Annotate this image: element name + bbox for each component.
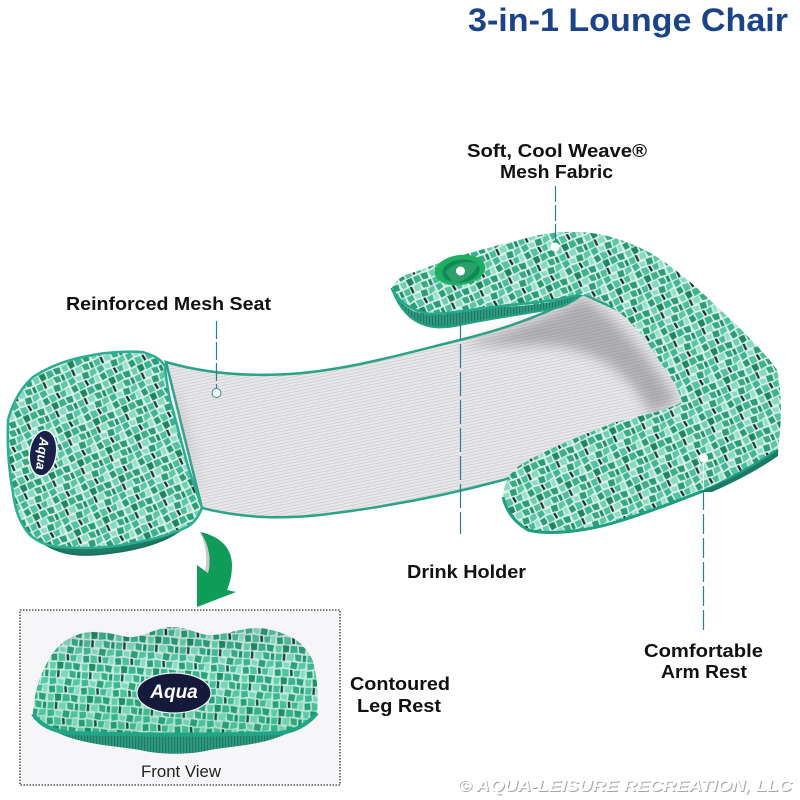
logo: Aqua xyxy=(137,673,211,713)
icon: drink holder xyxy=(433,252,487,288)
logo: Aqua on pillow: Aqua xyxy=(33,436,52,471)
reinforced mesh seat xyxy=(166,294,700,517)
copyright watermark: © AQUA-LEISURE RECREATION, LLC xyxy=(458,778,793,795)
label: soft, cool weave mesh fabric xyxy=(467,141,647,182)
copyright watermark: © AQUA-LEISURE RECREATION, LLC xyxy=(459,779,794,796)
label: contoured leg rest xyxy=(350,674,450,716)
label: contoured leg rest: Leg Rest xyxy=(357,696,441,716)
icon: green arrow xyxy=(197,532,236,607)
label: drink holder: Drink Holder xyxy=(407,562,526,582)
callout line: drink holder xyxy=(456,266,465,534)
logo: Aqua: Aqua xyxy=(149,682,198,703)
label: contoured leg rest: Contoured xyxy=(350,674,450,694)
lounge chair float xyxy=(8,232,781,555)
panel: front view xyxy=(20,610,340,785)
callout line: mesh fabric xyxy=(550,186,560,252)
leg rest pillow xyxy=(8,352,202,555)
callout line: arm rest xyxy=(699,454,708,630)
label: soft, cool weave mesh fabric: Soft, Cool Weave® xyxy=(467,141,647,161)
label: comfortable arm rest: Comfortable xyxy=(644,641,763,661)
label: soft, cool weave mesh fabric: Mesh Fabric xyxy=(500,162,613,182)
label: comfortable arm rest: Arm Rest xyxy=(661,662,747,682)
U-shaped backrest and arm rests xyxy=(392,232,781,533)
leg rest front view xyxy=(33,627,318,754)
logo: Aqua on pillow xyxy=(26,428,60,478)
callout line: mesh seat xyxy=(212,321,221,398)
label: reinforced mesh seat: Reinforced Mesh Seat xyxy=(66,294,271,314)
title: 3-in-1 Lounge Chair xyxy=(468,2,788,38)
label: comfortable arm rest xyxy=(644,641,763,682)
caption: front view: Front View xyxy=(141,762,222,781)
